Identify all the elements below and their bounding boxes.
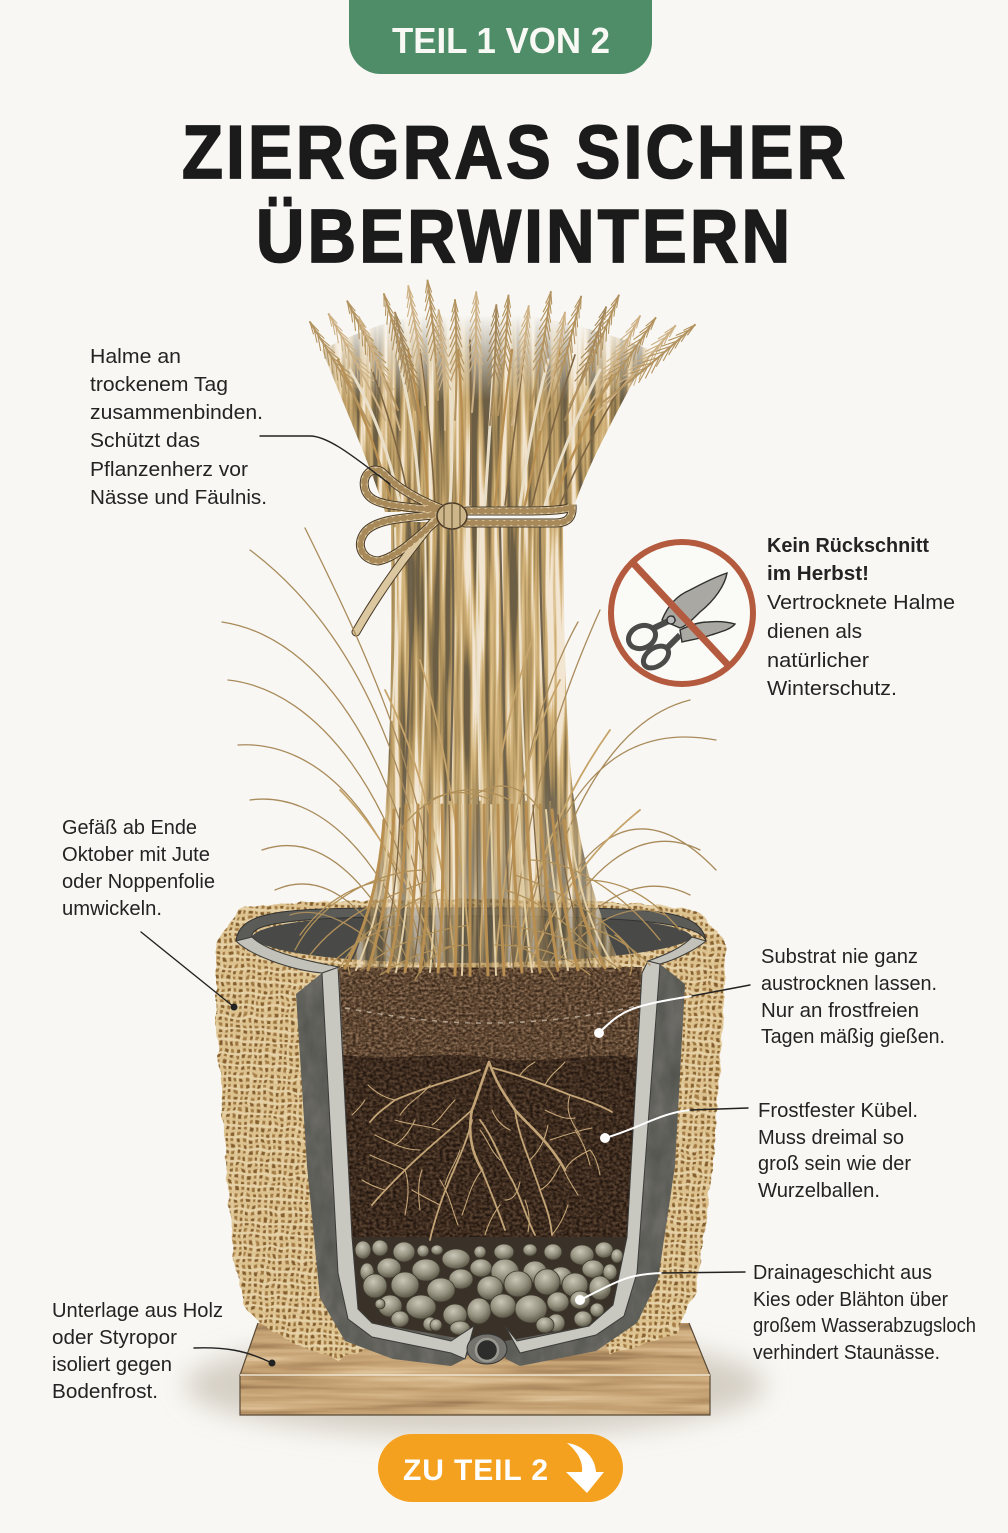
leader lines <box>141 436 750 1366</box>
drainage layer <box>352 1237 627 1341</box>
button: Zu Teil 2: ZU TEIL 2 <box>403 1454 548 1487</box>
leader: Kübel <box>600 1108 748 1143</box>
leader: Drainage <box>575 1272 745 1305</box>
text: Kübel: Muss dreimal so <box>758 1126 904 1149</box>
text: Unterlage <box>52 1299 223 1403</box>
title: ÜBERWINTERN <box>256 196 790 279</box>
text: Kein Rückschnitt: dienen als <box>767 620 862 643</box>
icon: arrow <box>566 1443 604 1493</box>
text: Unterlage: oder Styropor <box>52 1326 177 1349</box>
pot rim right <box>648 937 706 964</box>
text: Kübel: Wurzelballen. <box>758 1179 880 1202</box>
text: Kein Rückschnitt: Kein Rückschnitt <box>767 534 929 557</box>
pot inner wall right <box>505 961 660 1353</box>
text: Substrat: austrocknen lassen. <box>761 972 937 995</box>
burlap wrap: left <box>216 944 370 1359</box>
burlap wrap: back <box>216 899 725 985</box>
text: Unterlage: isoliert gegen <box>52 1353 172 1376</box>
text: Kein Rückschnitt: natürlicher <box>767 649 869 672</box>
text: Drainage: großem Wasserabzugsloch <box>753 1314 976 1337</box>
icon: scissors <box>625 573 735 672</box>
text: Halme: Nässe und Fäulnis. <box>90 486 267 509</box>
ground shadow <box>185 1333 765 1437</box>
text: Halme <box>90 345 267 509</box>
text: Halme: zusammenbinden. <box>90 401 263 424</box>
soil lower layer <box>343 1055 637 1241</box>
leader: Gefäß <box>141 932 238 1010</box>
text: Halme: Pflanzenherz vor <box>90 458 248 481</box>
text: Unterlage: Unterlage aus Holz <box>52 1299 223 1322</box>
leader: Unterlage <box>194 1348 276 1366</box>
leader: Substrat <box>594 985 750 1038</box>
text: Unterlage: Bodenfrost. <box>52 1380 158 1403</box>
planter cross-section <box>216 899 725 1366</box>
leader: Halme <box>260 436 390 484</box>
text: Halme: Halme an <box>90 345 181 368</box>
text: Substrat: Nur an frostfreien <box>761 999 919 1022</box>
roots <box>352 1062 612 1240</box>
pot inner wall left <box>322 967 474 1359</box>
text: Gefäß: Oktober mit Jute <box>62 843 210 866</box>
text: Kübel: groß sein wie der <box>758 1152 911 1175</box>
text: Kein Rückschnitt: im Herbst! <box>767 562 869 585</box>
pot rim back <box>236 908 706 941</box>
base strands <box>345 805 605 975</box>
text: Gefäß: Gefäß ab Ende <box>62 816 197 839</box>
pot rim left <box>236 937 339 973</box>
prohibition bar <box>632 562 728 665</box>
title: ZIERGRAS SICHER <box>182 112 845 195</box>
button: Zu Teil 2 <box>378 1434 623 1502</box>
bundled grass: lower stems <box>350 522 622 968</box>
text: Substrat: Substrat nie ganz <box>761 945 918 968</box>
text: Drainage: verhindert Staunässe. <box>753 1341 940 1364</box>
bundled grass: upper fan <box>305 280 701 512</box>
text: Kein Rückschnitt <box>767 534 955 700</box>
soil moisture line <box>345 1006 636 1023</box>
wooden base board <box>240 1323 710 1415</box>
text: Gefäß: umwickeln. <box>62 897 162 920</box>
feather plumes <box>305 280 701 432</box>
text: Drainage: Kies oder Blähton über <box>753 1288 948 1311</box>
drain hole <box>467 1334 507 1364</box>
icon: no cutting <box>611 542 753 684</box>
text: Kübel <box>758 1099 918 1202</box>
pot outer wall <box>296 964 685 1366</box>
pot interior back <box>252 913 692 963</box>
text: Drainage <box>753 1261 976 1364</box>
text: Kübel: Frostfester Kübel. <box>758 1099 918 1122</box>
arching grass blades <box>222 528 716 980</box>
text: Halme: Schützt das <box>90 429 200 452</box>
soil upper layer <box>339 967 642 1065</box>
text: Kein Rückschnitt: Vertrocknete Halme <box>767 591 955 614</box>
burlap wrap: right <box>600 941 725 1355</box>
text: Gefäß: oder Noppenfolie <box>62 870 215 893</box>
text: Drainage: Drainageschicht aus <box>753 1261 932 1284</box>
text: Substrat <box>761 945 945 1048</box>
title <box>182 112 845 279</box>
badge: Teil 1 von 2 <box>349 0 652 74</box>
text: Halme: trockenem Tag <box>90 373 228 396</box>
text: Gefäß <box>62 816 215 920</box>
text: Kein Rückschnitt: Winterschutz. <box>767 677 897 700</box>
twine knot and bow <box>356 470 572 632</box>
text: Substrat: Tagen mäßig gießen. <box>761 1025 945 1048</box>
badge: Teil 1 von 2: TEIL 1 VON 2 <box>392 20 610 61</box>
